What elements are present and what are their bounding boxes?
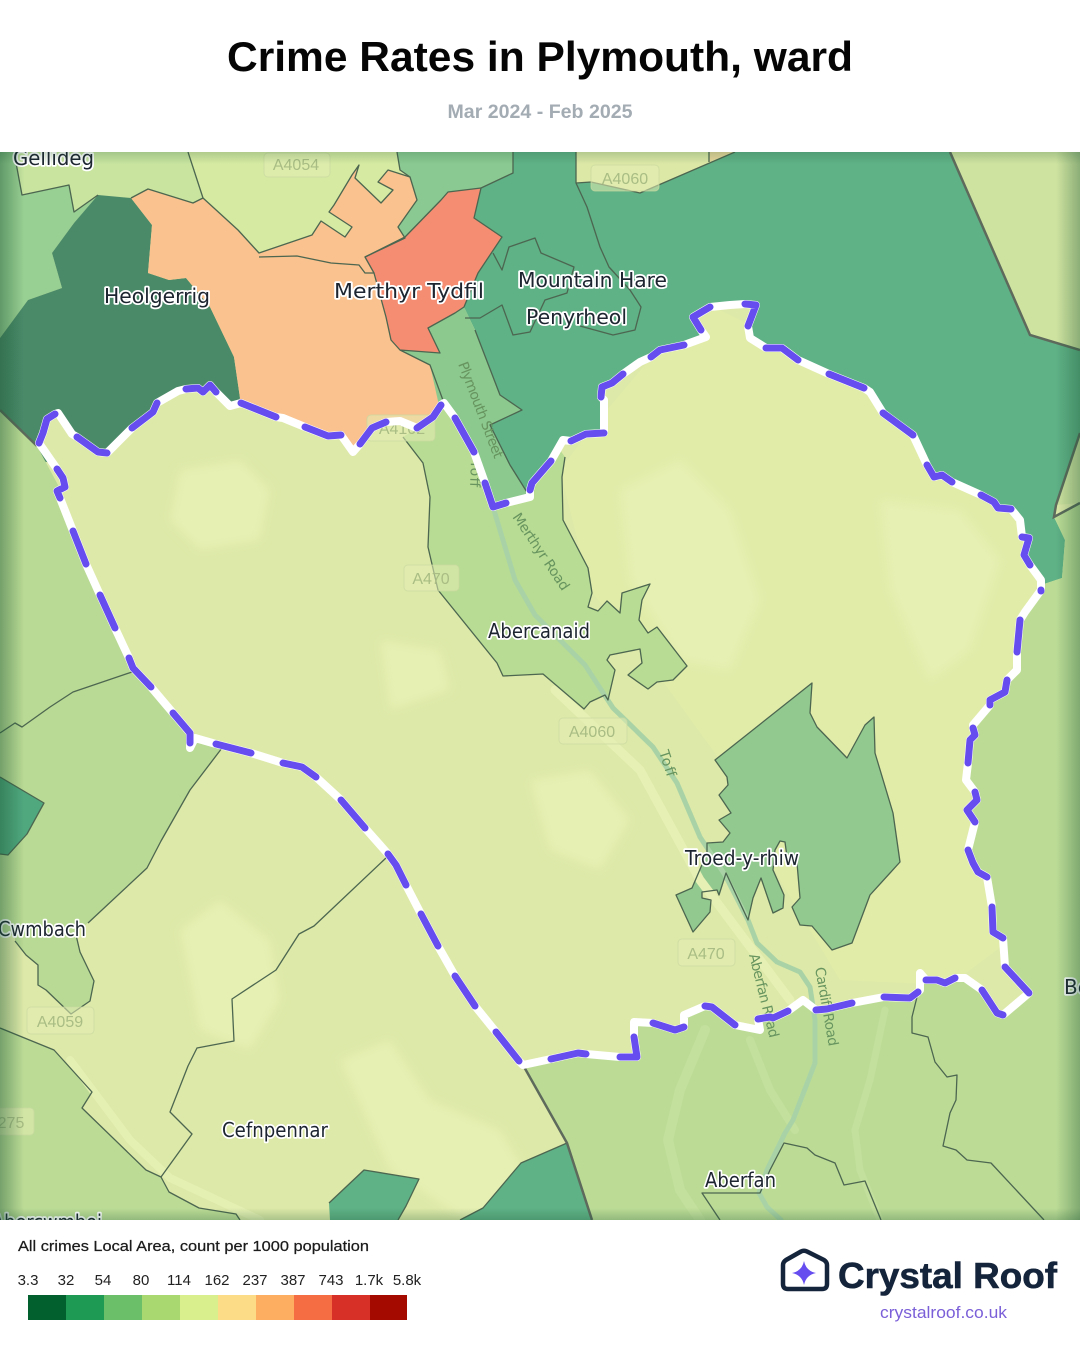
place labels: Heolgerrig <box>104 284 210 308</box>
region: small teal patch west <box>0 777 44 855</box>
legend values: 1.7k <box>355 1272 384 1289</box>
road shields <box>0 153 735 1135</box>
region: large teal north-east <box>464 152 1080 585</box>
legend values: 80 <box>133 1272 149 1289</box>
road shields: A470 <box>412 571 450 588</box>
legend values: 743 <box>318 1272 344 1289</box>
legend values <box>18 1272 422 1289</box>
region: Cwmbach green patch <box>15 930 94 1014</box>
legend values: 162 <box>204 1272 230 1289</box>
region: pale patch at A4060 <box>576 152 735 193</box>
thick district boundaries <box>0 152 1080 1220</box>
region: top centre pale <box>188 152 417 262</box>
region: Abercanaid <box>403 403 687 709</box>
place labels: Abercanaid <box>488 619 590 643</box>
region: Plymouth Street green <box>403 308 526 502</box>
legend colour scale <box>28 1295 407 1320</box>
legend values: 32 <box>58 1272 74 1289</box>
street labels: Aberfan Road <box>745 952 781 1039</box>
legend values: 3.3 <box>18 1272 38 1289</box>
place labels: Cwmbach <box>0 917 86 941</box>
boundary of Plymouth ward: white casing <box>39 304 1041 1065</box>
logo: Crystal Roof <box>783 1251 1058 1322</box>
place labels: Gellideg <box>13 146 94 170</box>
website: crystalroof.co.uk <box>880 1304 1008 1322</box>
region: east pale wedge <box>1058 438 1080 505</box>
street labels: Toff <box>655 747 679 779</box>
road shields: A470 <box>687 946 725 963</box>
legend title: All crimes Local Area, count per 1000 population <box>18 1238 369 1255</box>
street labels: Plymouth Street <box>454 360 506 461</box>
road shields: A4059 <box>37 1014 83 1031</box>
region: tan patch <box>710 152 732 162</box>
subtitle: date range: Mar 2024 - Feb 2025 <box>448 102 633 123</box>
region: teal south patches <box>329 1143 592 1220</box>
region: Troed-y-rhiw <box>676 683 900 950</box>
rivers and roads <box>70 507 885 1220</box>
street labels: Cardiff Road <box>811 966 841 1047</box>
region: top centre green <box>397 152 513 237</box>
boundary of Plymouth ward: purple dashes <box>39 304 1041 1061</box>
region: dark green Heolgerrig <box>0 195 245 480</box>
legend values: 54 <box>95 1272 111 1289</box>
road shields: A4060 <box>569 724 615 741</box>
icon: house with star <box>783 1251 827 1289</box>
road shields: A4102 <box>379 421 425 438</box>
legend values: 114 <box>167 1272 191 1289</box>
place labels: Aberfan <box>705 1168 776 1192</box>
road shields: A4054 <box>273 157 319 174</box>
legend <box>18 1238 422 1320</box>
region: Plymouth ward fill <box>39 304 1041 1065</box>
region: south-west green <box>0 1028 240 1220</box>
map edge vignette <box>0 152 1080 1220</box>
place labels: Cefnpennar <box>222 1118 329 1142</box>
legend values: 5.8k <box>393 1272 422 1289</box>
place labels: Troed-y-rhiw <box>684 846 799 870</box>
legend values: 387 <box>280 1272 306 1289</box>
east side of ward: lighter ground <box>560 300 1050 985</box>
place labels: Merthyr Tydfil <box>334 279 484 303</box>
street labels <box>454 360 841 1047</box>
place labels: Penyrheol <box>526 305 627 329</box>
region: salmon Merthyr Tydfil centre <box>365 188 502 353</box>
street labels: Toff <box>466 459 483 488</box>
place labels: Mountain Hare <box>518 268 667 292</box>
wordmark: Crystal Roof <box>838 1255 1058 1296</box>
street labels: Merthyr Road <box>509 510 572 594</box>
ward outlines <box>0 152 1044 1220</box>
legend values: 237 <box>242 1272 268 1289</box>
region: upper left pale green <box>14 152 203 212</box>
road shields: A4060 <box>602 171 648 188</box>
terrain patches south-west <box>186 908 516 1214</box>
region: top right pale <box>950 152 1080 350</box>
region: far left green <box>0 152 98 338</box>
terrain patches inside ward <box>170 460 1000 870</box>
title: Crime Rates in Plymouth, ward <box>227 33 853 80</box>
region: west green <box>0 410 222 935</box>
region: south-east green <box>523 503 1080 1220</box>
region: orange central <box>131 165 444 460</box>
